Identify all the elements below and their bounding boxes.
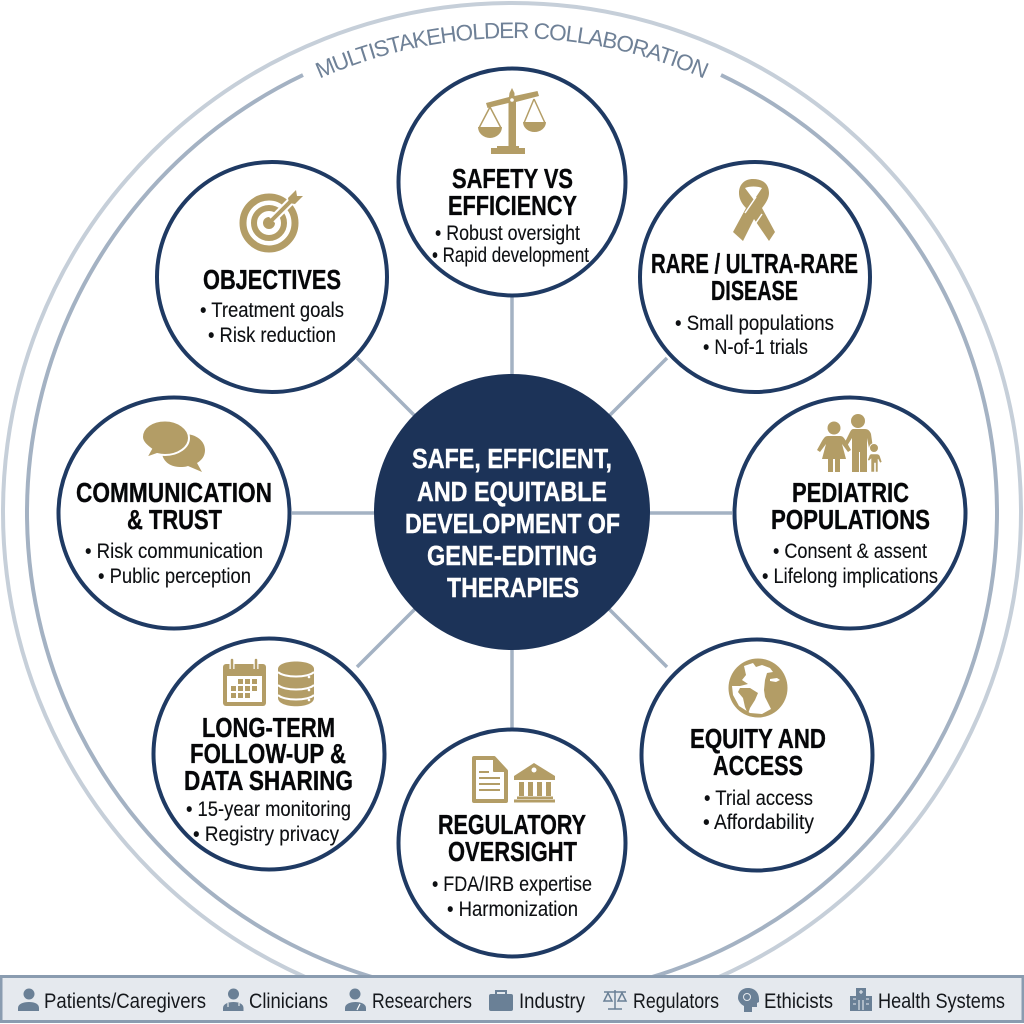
icon: globe [728,658,788,718]
icon: calendar [223,660,266,706]
panel: safety vs efficiency: EFFICIENCY [448,190,577,221]
central hub: SAFE, EFFICIENT, [412,443,612,474]
clinicians [223,988,328,1013]
curved label: multistakeholder collaboration: MULTISTAKEHOLDER COLLABORATION [315,22,709,78]
panel: rare / ultra-rare disease [640,162,870,392]
panel: long-term follow-up and data sharing: DATA SHARING [184,765,353,796]
central hub: DEVELOPMENT OF [405,508,620,539]
bullets: • FDA/IRB expertise [432,873,592,896]
regulators [604,990,719,1013]
bullets: • Small populations [675,312,834,335]
ethicists: Ethicists [764,990,833,1013]
icon: balance scales [478,88,546,154]
icon: awareness ribbon [733,179,775,241]
panel: rare / ultra-rare disease: DISEASE [711,275,798,306]
bullets: • Trial access [704,787,813,810]
heading: LONG-TERM [202,712,335,743]
heading: OBJECTIVES [203,264,341,295]
bullets: • Consent & assent [773,540,927,563]
health systems: Health Systems [878,990,1005,1013]
heading: EQUITY AND [690,723,826,754]
connectors: spokes from hub to panels [292,296,732,732]
central hub [374,374,650,650]
panel: long-term follow-up and data sharing: • Registry privacy [193,823,339,846]
panel: equity and access: ACCESS [713,750,803,781]
industry [489,990,585,1013]
icon: institution building [514,763,555,802]
researchers: Researchers [372,990,472,1013]
heading: COMMUNICATION [76,477,272,508]
icon: document [474,758,506,801]
bullets: • 15-year monitoring [186,798,351,821]
panel: equity and access: • Affordability [703,811,814,834]
panel: pediatric populations: POPULATIONS [771,504,930,535]
panel: safety vs efficiency [398,68,626,296]
panel: regulatory oversight: • Harmonization [447,898,578,921]
panel: communication and trust: & TRUST [127,504,222,535]
panel: pediatric populations: • Lifelong implications [762,565,938,588]
clinicians: Clinicians [249,990,328,1013]
central hub: GENE-EDITING [427,540,597,571]
icon: family [817,414,882,472]
panel: rare / ultra-rare disease: • N-of-1 trials [703,336,808,359]
heading: SAFETY VS [452,163,573,194]
health systems [850,988,1005,1013]
central hub: AND EQUITABLE [417,476,607,507]
panel: long-term follow-up and data sharing [154,638,384,870]
ethicists [738,988,833,1013]
heading: RARE / ULTRA-RARE [651,248,858,279]
icon: speech bubbles [142,420,205,472]
researchers [345,988,472,1013]
heading: PEDIATRIC [792,477,909,508]
industry: Industry [519,990,585,1013]
panel: regulatory oversight: OVERSIGHT [448,836,577,867]
icon: target with arrow [243,190,303,249]
panel: communication and trust [58,398,290,628]
panel: objectives: • Risk reduction [208,324,336,347]
panel: safety vs efficiency: • Rapid development [432,244,589,267]
bullets: • Risk communication [85,540,263,563]
panel: long-term follow-up and data sharing: FOLLOW-UP & [190,738,346,769]
panel: regulatory oversight [398,730,626,956]
patients/caregivers: Patients/Caregivers [44,990,206,1013]
bullets: • Treatment goals [200,299,344,322]
bullets: • Robust oversight [435,222,580,245]
panel: communication and trust: • Public perception [98,565,251,588]
panel: pediatric populations [734,398,966,628]
legend bar: stakeholders [1,976,1023,1022]
central hub: THERAPIES [447,572,579,603]
panel: equity and access [642,640,872,870]
regulators: Regulators [633,990,719,1013]
heading: REGULATORY [438,809,586,840]
panel: objectives [157,162,387,392]
icon: database [278,662,314,706]
